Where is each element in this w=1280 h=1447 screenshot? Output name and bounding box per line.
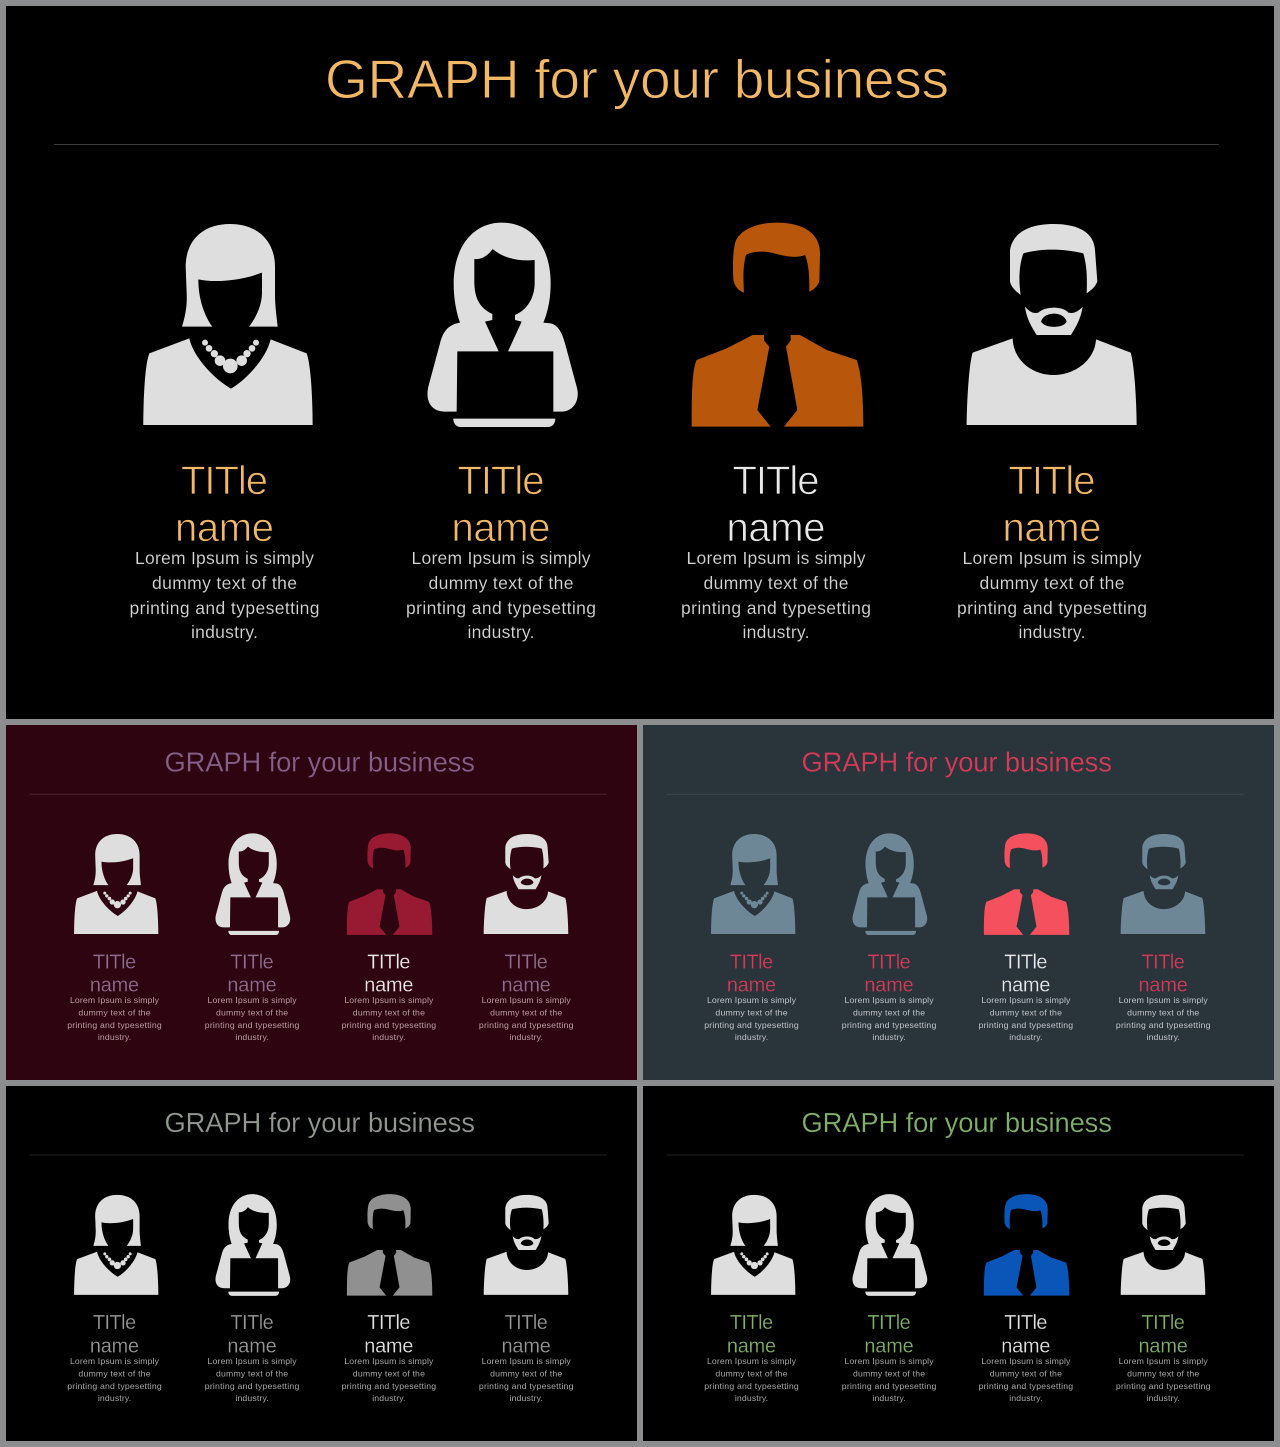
card text: Lorem Ipsum is simply [208,1356,297,1366]
card heading: TITle [1142,951,1185,973]
card text: dummy text of the [78,1008,151,1018]
card text [979,1356,1073,1403]
card heading: name [864,1336,914,1358]
card heading: name [1139,975,1188,997]
card 1 [704,1195,799,1403]
card heading [726,459,826,550]
card text: dummy text of the [715,1008,788,1018]
card text: industry. [468,622,534,642]
card 1 [67,834,162,1042]
card heading [1139,1312,1188,1358]
icon: bearded man [484,834,568,934]
card heading [1001,951,1050,997]
card heading [1001,1312,1050,1358]
icon: woman with necklace [711,1195,795,1295]
card text: Lorem Ipsum is simply [70,1356,160,1366]
card text: Lorem Ipsum is simply [482,1356,571,1366]
card 2 [205,833,299,1042]
card 4 [1116,834,1211,1042]
card heading [227,951,277,997]
icon: man with tie [347,833,432,935]
card text: industry. [742,622,810,642]
card text: printing and typesetting [479,1020,574,1030]
card text [406,548,596,642]
icon: bearded man [484,1195,568,1295]
card text [205,1356,299,1403]
card text [479,995,574,1042]
card text: printing and typesetting [681,598,871,618]
card text: industry. [510,1032,543,1042]
card heading [227,1312,277,1358]
card heading: TITle [181,459,268,503]
card text [1116,995,1211,1042]
card text: Lorem Ipsum is simply [686,548,866,568]
card heading: name [364,975,413,997]
card heading: name [90,975,139,997]
card text: printing and typesetting [979,1020,1073,1030]
card heading: name [452,506,550,550]
icon: man with tie [692,223,863,427]
card text: printing and typesetting [406,598,596,618]
card text: printing and typesetting [704,1381,799,1391]
card text: printing and typesetting [1116,1020,1211,1030]
card text: printing and typesetting [979,1381,1073,1391]
title: GRAPH for your business [801,1107,1112,1138]
card heading [175,459,274,550]
card text: dummy text of the [353,1368,425,1378]
card heading: TITle [1008,459,1096,503]
card heading: name [175,506,274,550]
card 4 [1116,1195,1211,1403]
card 1 [67,1195,162,1403]
card heading: TITle [1142,1312,1185,1334]
card text: industry. [235,1393,269,1403]
card text: dummy text of the [353,1008,425,1018]
icon: woman with necklace [74,834,158,934]
card text [704,1356,799,1403]
card heading: name [1001,975,1050,997]
icon: woman with necklace [711,834,795,934]
card heading: TITle [730,951,773,973]
card text [67,995,162,1042]
card heading [502,951,551,997]
card text [479,1356,574,1403]
card text: printing and typesetting [205,1381,299,1391]
card heading: TITle [867,951,911,973]
card heading: TITle [505,1312,548,1334]
card text [342,1356,436,1403]
card text: dummy text of the [216,1368,288,1378]
card text: dummy text of the [152,573,297,593]
card heading: name [502,975,551,997]
card heading: name [1139,1336,1188,1358]
card heading: TITle [867,1312,911,1334]
icon: man with tie [984,833,1069,935]
card text: dummy text of the [1127,1008,1199,1018]
card text: dummy text of the [428,573,574,593]
card heading [727,1312,776,1358]
card text: industry. [372,1032,406,1042]
card heading [727,951,776,997]
card heading [864,951,914,997]
card text: printing and typesetting [67,1020,162,1030]
card text: industry. [872,1393,906,1403]
card 2 [842,833,936,1042]
card text: dummy text of the [216,1008,288,1018]
card text: Lorem Ipsum is simply [981,1356,1071,1366]
card text [1116,1356,1211,1403]
card text: Lorem Ipsum is simply [1119,1356,1208,1366]
card text: industry. [1147,1393,1180,1403]
card 2 [406,223,596,642]
card heading [364,951,413,997]
card text: printing and typesetting [842,1381,936,1391]
card heading: name [864,975,914,997]
card 2 [205,1194,299,1403]
card text: dummy text of the [704,573,848,593]
title: GRAPH for your business [164,1107,475,1138]
icon: woman with laptop [215,833,290,935]
card heading: name [1001,1336,1050,1358]
card text: Lorem Ipsum is simply [962,548,1142,568]
icon: woman with necklace [143,224,313,425]
card text: industry. [735,1032,768,1042]
card 3 highlighted [979,833,1073,1042]
card text [681,548,871,642]
card heading [452,459,550,550]
card text: industry. [872,1032,906,1042]
card heading [1139,951,1188,997]
icon: man with tie [984,1194,1069,1296]
card text: Lorem Ipsum is simply [208,995,297,1005]
card text: dummy text of the [853,1008,925,1018]
card text: printing and typesetting [342,1381,436,1391]
card 4 [479,1195,574,1403]
icon: bearded man [1121,1195,1205,1295]
card text: Lorem Ipsum is simply [981,995,1071,1005]
card text [205,995,299,1042]
card text: industry. [1018,622,1086,642]
icon: man with tie [347,1194,432,1296]
card text: Lorem Ipsum is simply [344,1356,434,1366]
card text: printing and typesetting [130,598,320,618]
title: GRAPH for your business [801,746,1112,777]
icon: woman with necklace [74,1195,158,1295]
card 3 highlighted [342,833,436,1042]
card heading: name [364,1336,413,1358]
card text [342,995,436,1042]
icon: woman with laptop [215,1194,290,1296]
card heading: TITle [730,1312,773,1334]
icon: woman with laptop [852,1194,927,1296]
card heading [502,1312,551,1358]
panel: main black slide [6,6,1274,719]
card text: printing and typesetting [342,1020,436,1030]
card heading: name [727,1336,776,1358]
card heading: name [727,975,776,997]
panel: grey on black slide [6,1086,637,1441]
card text: Lorem Ipsum is simply [707,995,797,1005]
card text: dummy text of the [980,573,1124,593]
icon: bearded man [1121,834,1205,934]
card text: printing and typesetting [842,1020,936,1030]
card text: printing and typesetting [205,1020,299,1030]
card text [67,1356,162,1403]
card text: Lorem Ipsum is simply [70,995,160,1005]
card heading [90,1312,139,1358]
card heading: name [1002,506,1102,550]
card text: Lorem Ipsum is simply [707,1356,797,1366]
card text: dummy text of the [990,1368,1062,1378]
card 4 [479,834,574,1042]
card text: Lorem Ipsum is simply [135,548,314,568]
card text: industry. [735,1393,768,1403]
card text: dummy text of the [715,1368,788,1378]
card heading: TITle [505,951,548,973]
card 3 highlighted [342,1194,436,1403]
panel: maroon slide [6,725,637,1080]
card heading: TITle [230,1312,274,1334]
card heading: TITle [1004,1312,1048,1334]
card 2 [842,1194,936,1403]
card text: industry. [98,1032,131,1042]
card text: Lorem Ipsum is simply [845,995,934,1005]
card text: industry. [98,1393,131,1403]
card text [842,995,936,1042]
card text: printing and typesetting [1116,1381,1211,1391]
card heading: TITle [93,951,136,973]
card text: Lorem Ipsum is simply [482,995,571,1005]
card text: dummy text of the [490,1368,562,1378]
card text [957,548,1147,642]
card heading: TITle [367,951,411,973]
card heading: TITle [93,1312,136,1334]
card text [979,995,1073,1042]
card heading: name [90,1336,139,1358]
card text [130,548,320,642]
card text: dummy text of the [78,1368,151,1378]
title: GRAPH for your business [164,746,475,777]
card heading: name [726,506,826,550]
card heading [1002,459,1102,550]
card text: dummy text of the [853,1368,925,1378]
card text: Lorem Ipsum is simply [344,995,434,1005]
card text: dummy text of the [490,1008,562,1018]
card heading: TITle [367,1312,411,1334]
card text: industry. [1009,1393,1043,1403]
card text [704,995,799,1042]
card text: printing and typesetting [704,1020,799,1030]
card 4 [957,224,1147,642]
card text: printing and typesetting [957,598,1147,618]
panel: slate slide [643,725,1274,1080]
icon: woman with laptop [852,833,927,935]
card text: printing and typesetting [67,1381,162,1391]
card text: industry. [1147,1032,1180,1042]
card text: industry. [372,1393,406,1403]
card text: printing and typesetting [479,1381,574,1391]
card text: Lorem Ipsum is simply [845,1356,934,1366]
icon: bearded man [967,224,1137,425]
card heading [864,1312,914,1358]
card heading [90,951,139,997]
card heading: TITle [1004,951,1048,973]
card text: industry. [510,1393,543,1403]
title: GRAPH for your business [325,48,949,110]
card heading: TITle [230,951,274,973]
card 1 [130,224,320,642]
card heading: TITle [732,459,820,503]
card text [842,1356,936,1403]
card heading: name [502,1336,551,1358]
card text: industry. [235,1032,269,1042]
card text: industry. [1009,1032,1043,1042]
card heading [364,1312,413,1358]
card 1 [704,834,799,1042]
card text: dummy text of the [1127,1368,1199,1378]
card 3 highlighted [979,1194,1073,1403]
card heading: name [227,975,277,997]
card text: Lorem Ipsum is simply [412,548,591,568]
card heading: name [227,1336,277,1358]
card text: Lorem Ipsum is simply [1119,995,1208,1005]
card heading: TITle [458,459,544,503]
card text: dummy text of the [990,1008,1062,1018]
card 3 highlighted [681,223,871,642]
icon: woman with laptop [427,223,578,427]
card text: industry. [191,622,258,642]
panel: green and blue on black slide [643,1086,1274,1441]
